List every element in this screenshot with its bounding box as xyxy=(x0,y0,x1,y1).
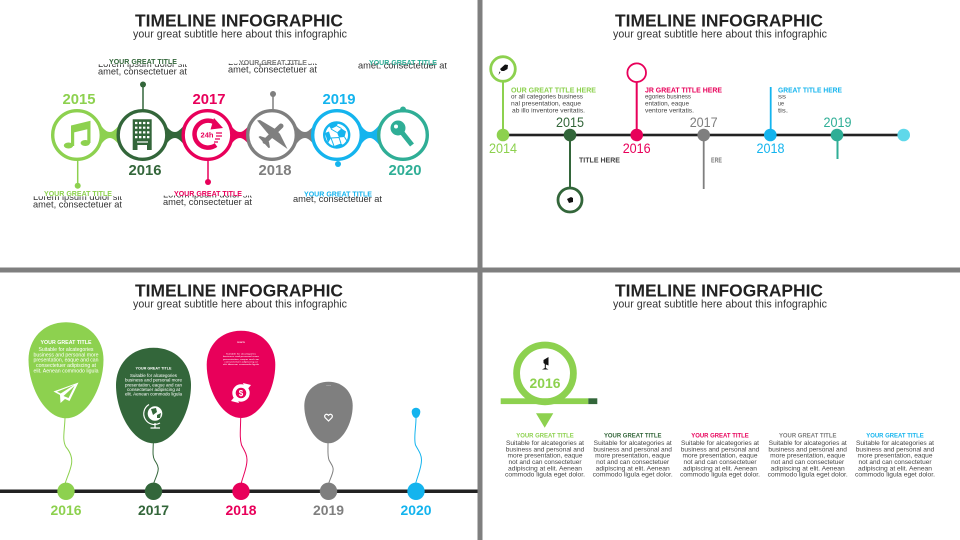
title: TIMELINE INFOGRAPHIC xyxy=(615,280,823,300)
column 2016: Suitable for alcategories at xyxy=(506,440,584,447)
text: 2016 note: JR GREAT TITLE HERE xyxy=(645,86,722,94)
text: 2017 note xyxy=(163,191,252,206)
column 2018: not and can consectetuer xyxy=(684,459,757,466)
end node xyxy=(897,129,910,141)
balloon 2018: consectetuer adipiscing at xyxy=(224,360,258,364)
balloon 2018: presentation, eaque and can xyxy=(223,358,260,361)
milestone 2017: 2017 xyxy=(192,91,226,108)
balloon 2017: 2017 xyxy=(138,502,169,518)
text: 2014 note xyxy=(511,86,596,114)
icon: heart xyxy=(325,414,332,421)
column 2020: not and can consectetuer xyxy=(858,459,932,466)
balloon 2016: 2016 xyxy=(50,502,82,518)
icon: dollar cycle xyxy=(231,383,251,403)
text: 2020 note: YOUR GREAT TITLE xyxy=(369,58,437,67)
column 2020: commodo ligula eget dolor. xyxy=(855,472,935,479)
column 2020: more presentation, eaque xyxy=(858,453,933,460)
text: 2020 note: amet, consectetuer at xyxy=(358,60,447,72)
balloon 2017: Suitable for alcategories xyxy=(130,373,178,378)
balloon 2016: presentation, eaque and can xyxy=(34,358,99,364)
column 2017: more presentation, eaque xyxy=(595,453,671,460)
text: 2018 note: ue xyxy=(778,100,784,108)
milestone 2019: 2019 xyxy=(322,91,356,108)
icon: small mark xyxy=(567,197,573,203)
balloon 2019: YOUR GREAT TITLE xyxy=(326,383,331,386)
milestone 2014: 2014 xyxy=(489,141,517,156)
column 2017 xyxy=(593,432,673,479)
column 2019: commodo ligula eget dolor. xyxy=(768,472,848,479)
subtitle: your great subtitle here about this infographic xyxy=(133,28,347,40)
text: 2014 note: nal presentation, eaque xyxy=(511,100,581,108)
icon: dollar cycle: $ xyxy=(239,389,244,398)
balloon 2018: business and personal more xyxy=(223,355,260,358)
text: 2019 note: YOUR GREAT TITLE xyxy=(304,190,372,198)
column 2016: adipiscing at elit. Aenean xyxy=(508,465,582,472)
milestone 2016 xyxy=(623,63,651,156)
milestone 2019 xyxy=(824,115,852,159)
text: 2016 note: egories business xyxy=(645,94,692,101)
balloon 2020 xyxy=(400,408,432,518)
text: 2016 note: Lorem ipsum dolor sit xyxy=(98,59,187,70)
column 2016: not and can consectetuer xyxy=(508,459,582,466)
milestone 2019 xyxy=(313,91,361,167)
column 2019: not and can consectetuer xyxy=(771,459,845,466)
balloon 2018 xyxy=(207,331,275,518)
balloon 2016: consectetuer adipiscing at xyxy=(36,363,97,369)
text: 2016 note: entation, eaque xyxy=(645,100,689,108)
text: 2016 note xyxy=(645,86,722,114)
column 2018: Suitable for alcategories at xyxy=(681,440,759,447)
column 2017: business and personal and xyxy=(593,446,672,453)
balloon 2019: 2019 xyxy=(313,502,344,518)
balloon 2016: YOUR GREAT TITLE xyxy=(40,340,92,346)
milestone 2016: 2016 xyxy=(623,141,651,156)
text: 2017 note: ERE xyxy=(711,156,722,164)
text: 2016 note: ventore veritatis. xyxy=(645,108,694,114)
connectors between circles xyxy=(100,124,380,146)
milestone 2020: 2020 xyxy=(388,162,422,179)
title: TIMELINE INFOGRAPHIC xyxy=(135,10,343,30)
balloon 2018: Suitable for alcategories xyxy=(226,352,257,356)
milestone 2020 xyxy=(379,106,427,179)
text: 2017 note: Lorem ipsum dolor sit xyxy=(163,190,252,200)
balloon 2017: elit. Aenean commodo ligula xyxy=(125,392,182,397)
icon: airplane xyxy=(257,120,288,149)
balloon 2017: consectetuer adipiscing at xyxy=(127,387,181,392)
column 2018: business and personal and xyxy=(681,446,760,453)
column 2019: more presentation, eaque xyxy=(770,453,846,460)
text: 2014 note: OUR GREAT TITLE HERE xyxy=(511,86,596,94)
balloon 2018: 2018 xyxy=(226,502,257,518)
column 2020: Suitable for alcategories at xyxy=(856,440,934,447)
milestone 2018: 2018 xyxy=(258,162,292,179)
text: 2017 note: YOUR GREAT TITLE xyxy=(174,189,242,198)
text: 2015 note: Lorem ipsum dolor sit xyxy=(33,192,122,203)
icon: globe xyxy=(144,404,162,428)
subtitle: your great subtitle here about this infographic xyxy=(613,28,827,40)
text: 2018 note: YOUR GREAT TITLE xyxy=(239,58,307,67)
panel: circle chain timeline xyxy=(33,10,447,210)
icon: key xyxy=(390,120,412,145)
milestone 2017: 2017 xyxy=(690,115,718,130)
text: 2019 note: amet, consectetuer at xyxy=(293,194,382,205)
column 2020 xyxy=(855,432,935,479)
balloon 2016: business and personal more xyxy=(34,352,99,358)
column 2017: Suitable for alcategories at xyxy=(594,440,672,447)
text: 2018 note: amet, consectetuer at xyxy=(228,64,317,76)
balloon 2019 xyxy=(304,382,353,518)
balloon 2017: presentation, eaque and can xyxy=(125,382,182,387)
column 2018: YOUR GREAT TITLE xyxy=(691,432,749,440)
column 2016: more presentation, eaque xyxy=(508,453,583,460)
column 2017: commodo ligula eget dolor. xyxy=(593,472,673,479)
column 2019 xyxy=(768,432,848,479)
balloon 2018: YOUR GREAT TITLE xyxy=(237,341,245,344)
icon: 24h arrow: 24h xyxy=(201,130,214,140)
text: 2018 note xyxy=(228,60,317,74)
column 2019: adipiscing at elit. Aenean xyxy=(771,465,845,472)
column 2016: YOUR GREAT TITLE xyxy=(516,432,574,440)
balloon 2016: elit. Aenean commodo ligula xyxy=(34,368,99,374)
column 2019: Suitable for alcategories at xyxy=(769,440,847,447)
milestone 2015 xyxy=(556,115,584,212)
year ring marker xyxy=(501,345,597,404)
title: TIMELINE INFOGRAPHIC xyxy=(615,10,823,30)
text: 2016 note xyxy=(98,59,187,76)
text: 2014 note: or all categories business xyxy=(511,94,584,101)
balloon 2020: 2020 xyxy=(400,502,432,518)
column 2019: business and personal and xyxy=(768,446,847,453)
balloon 2017 xyxy=(116,348,191,518)
panel: progress columns timeline xyxy=(501,280,935,479)
arrow: down pointer xyxy=(536,413,553,428)
milestone 2015 xyxy=(53,91,101,189)
icon: paper plane xyxy=(54,382,78,403)
column 2016: business and personal and xyxy=(506,446,585,453)
text: 2015 note: YOUR GREAT TITLE xyxy=(44,189,112,198)
column 2018: adipiscing at elit. Aenean xyxy=(683,465,757,472)
column 2020: YOUR GREAT TITLE xyxy=(866,432,924,440)
column 2017: adipiscing at elit. Aenean xyxy=(596,465,670,472)
icon: music note xyxy=(64,121,90,148)
panel: balloon timeline xyxy=(0,280,478,518)
column 2016 xyxy=(505,432,585,479)
icon: soccer ball xyxy=(324,122,349,148)
timeline axis xyxy=(503,134,903,136)
milestone 2019: 2019 xyxy=(824,115,852,130)
column 2018: commodo ligula eget dolor. xyxy=(680,472,760,479)
text: 2015 note: TITLE HERE xyxy=(579,156,620,164)
subtitle: your great subtitle here about this infographic xyxy=(613,298,827,310)
icon: pin xyxy=(498,64,508,75)
milestone 2017 xyxy=(183,91,232,185)
milestone 2015: 2015 xyxy=(556,115,584,130)
balloon 2016: Suitable for alcategories xyxy=(38,347,94,353)
text: 2014 note: ab illo inventore veritatis. xyxy=(512,108,585,114)
balloon 2016 xyxy=(28,322,104,518)
text: 2017 note: amet, consectetuer at xyxy=(163,197,252,208)
text: 2019 note xyxy=(293,192,382,204)
milestone 2015: 2015 xyxy=(62,91,96,108)
column 2019: YOUR GREAT TITLE xyxy=(779,432,836,440)
text: 2018 note: GREAT TITLE HERE xyxy=(778,86,842,94)
title: TIMELINE INFOGRAPHIC xyxy=(135,280,343,300)
text: 2015 note xyxy=(33,191,122,209)
milestone 2016 xyxy=(118,82,167,179)
column 2017: YOUR GREAT TITLE xyxy=(604,432,661,440)
milestone 2018 xyxy=(248,91,296,179)
column 2016: commodo ligula eget dolor. xyxy=(505,472,585,479)
milestone 2017 xyxy=(690,115,718,189)
year ring marker: 2016 xyxy=(530,375,561,391)
text: 2016 note: amet, consectetuer at xyxy=(98,66,187,78)
milestone 2018: 2018 xyxy=(756,141,784,156)
column 2020: adipiscing at elit. Aenean xyxy=(858,465,932,472)
icon: building xyxy=(133,119,152,150)
text: 2018 note: tis. xyxy=(778,108,788,114)
milestone 2016: 2016 xyxy=(128,162,162,179)
text: 2018 note: Lorem ipsum dolor sit xyxy=(228,57,317,68)
column 2017: not and can consectetuer xyxy=(596,459,670,466)
milestone 2018 xyxy=(756,87,784,156)
balloon 2018: elit. Aenean commodo ligula xyxy=(223,363,260,366)
text: 2015 note: amet, consectetuer at xyxy=(33,200,122,210)
column 2018: more presentation, eaque xyxy=(682,453,758,460)
panel: straight line timeline xyxy=(489,10,910,212)
text: 2018 note xyxy=(778,86,842,114)
text: 2018 note: ss xyxy=(778,94,787,101)
balloon 2017: business and personal more xyxy=(125,378,182,383)
icon: lamp xyxy=(542,357,548,370)
column 2018 xyxy=(680,432,760,479)
timeline axis xyxy=(0,490,478,493)
milestone 2014 xyxy=(489,57,517,156)
column 2020: business and personal and xyxy=(856,446,935,453)
balloon 2017: YOUR GREAT TITLE xyxy=(136,365,172,370)
subtitle: your great subtitle here about this infographic xyxy=(133,298,347,310)
text: 2016 note: YOUR GREAT TITLE xyxy=(109,57,177,66)
